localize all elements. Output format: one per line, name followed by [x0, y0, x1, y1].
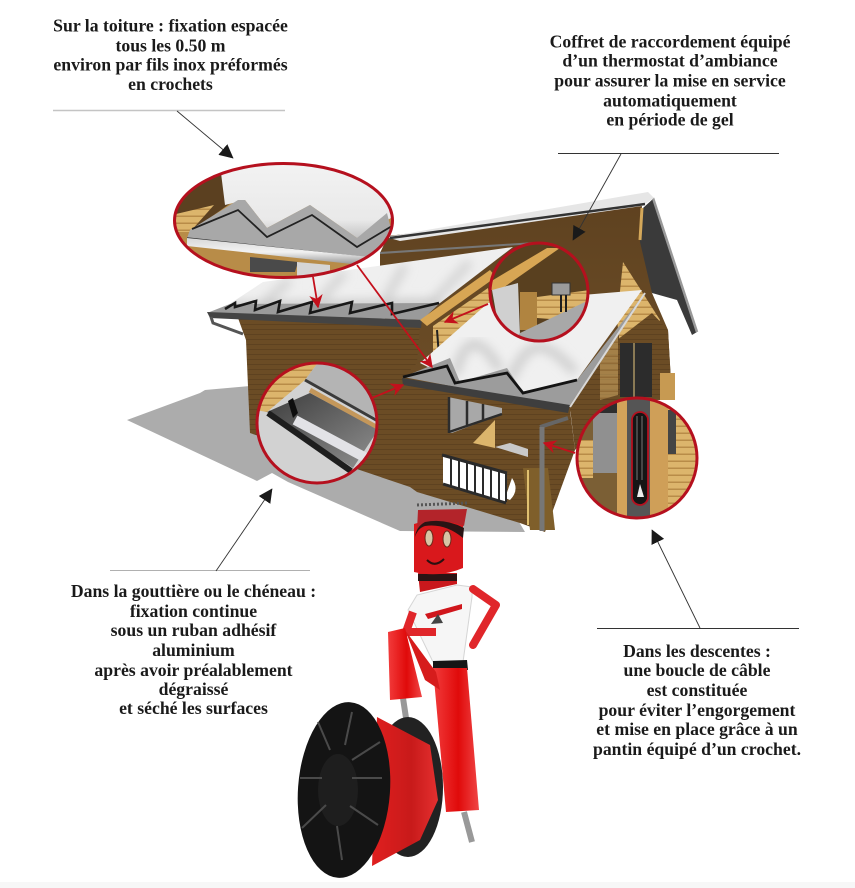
upper roof one: snow and slate	[207, 247, 513, 334]
text block: connection box: d’un thermostat d’ambiance	[562, 50, 778, 70]
raised leg	[388, 628, 422, 700]
mouth	[427, 559, 444, 564]
text block: gutter: et séché les surfaces	[119, 698, 268, 718]
text block: downpipes	[593, 641, 801, 759]
text block: gutter: après avoir préalablement	[94, 660, 293, 680]
right arm	[473, 589, 496, 645]
zoom lens: downpipe loop	[575, 396, 699, 520]
house illustration	[127, 192, 697, 532]
text block: roof fixation	[53, 16, 288, 94]
left arm	[406, 612, 436, 632]
zoom lens: roof cable	[170, 160, 396, 282]
shirt	[408, 585, 472, 662]
mascot with cable spool	[292, 503, 496, 881]
text block: downpipes: une boucle de câble	[624, 660, 771, 680]
upper roof and gable	[380, 192, 697, 412]
black pointer arrows	[177, 111, 700, 628]
hairline	[415, 521, 464, 538]
balcony railing	[442, 455, 516, 503]
gallery wall right of porch	[570, 313, 675, 450]
text block: gutter: Dans la gouttière ou le chéneau :	[71, 581, 316, 601]
main lower wall	[238, 318, 575, 532]
zoom lens: gutter ribbon	[255, 360, 380, 485]
text block: roof fixation: environ par fils inox préformés	[53, 54, 288, 74]
text block: roof fixation: Sur la toiture : fixation espacée	[53, 16, 288, 36]
hat	[417, 509, 467, 530]
eyes	[425, 530, 451, 547]
text block: roof fixation: tous les 0.50 m	[115, 36, 226, 56]
ground shadow	[127, 386, 525, 532]
text block: connection box: Coffret de raccordement équipé	[550, 32, 791, 52]
roof two: snow and slate	[402, 290, 645, 413]
front window	[448, 397, 528, 457]
cable spool	[292, 699, 443, 881]
text block: gutter	[71, 581, 316, 718]
zoom lens: thermostat box	[488, 241, 592, 345]
timber under roof one	[420, 270, 496, 326]
text block: roof fixation: en crochets	[128, 74, 213, 94]
porch post and downpipe	[523, 418, 568, 531]
logo on shirt	[425, 604, 462, 619]
text block: gutter: sous un ruban adhésif	[111, 620, 277, 640]
text block: downpipes: et mise en place grâce à un	[596, 719, 798, 739]
rope legs	[403, 698, 472, 842]
text block: gutter: aluminium	[152, 640, 235, 660]
straight leg	[433, 668, 479, 812]
belt	[433, 660, 468, 670]
text block: gutter: dégraissé	[159, 679, 229, 699]
red arrows from lenses	[313, 265, 575, 453]
text block: connection box: en période de gel	[606, 110, 734, 130]
text block: connection box	[550, 32, 791, 130]
head	[414, 519, 463, 574]
text block: downpipes: Dans les descentes :	[623, 641, 771, 661]
text block: gutter: fixation continue	[130, 601, 257, 621]
text block: downpipes: pantin équipé d’un crochet.	[593, 739, 801, 759]
text block: downpipes: est constituée	[647, 680, 747, 700]
bottom page tint	[0, 882, 855, 888]
text block: connection box: automatiquement	[603, 90, 737, 110]
text block: connection box: pour assurer la mise en service	[554, 70, 786, 90]
neck	[418, 573, 457, 592]
text block: downpipes: pour éviter l’engorgement	[599, 700, 796, 720]
